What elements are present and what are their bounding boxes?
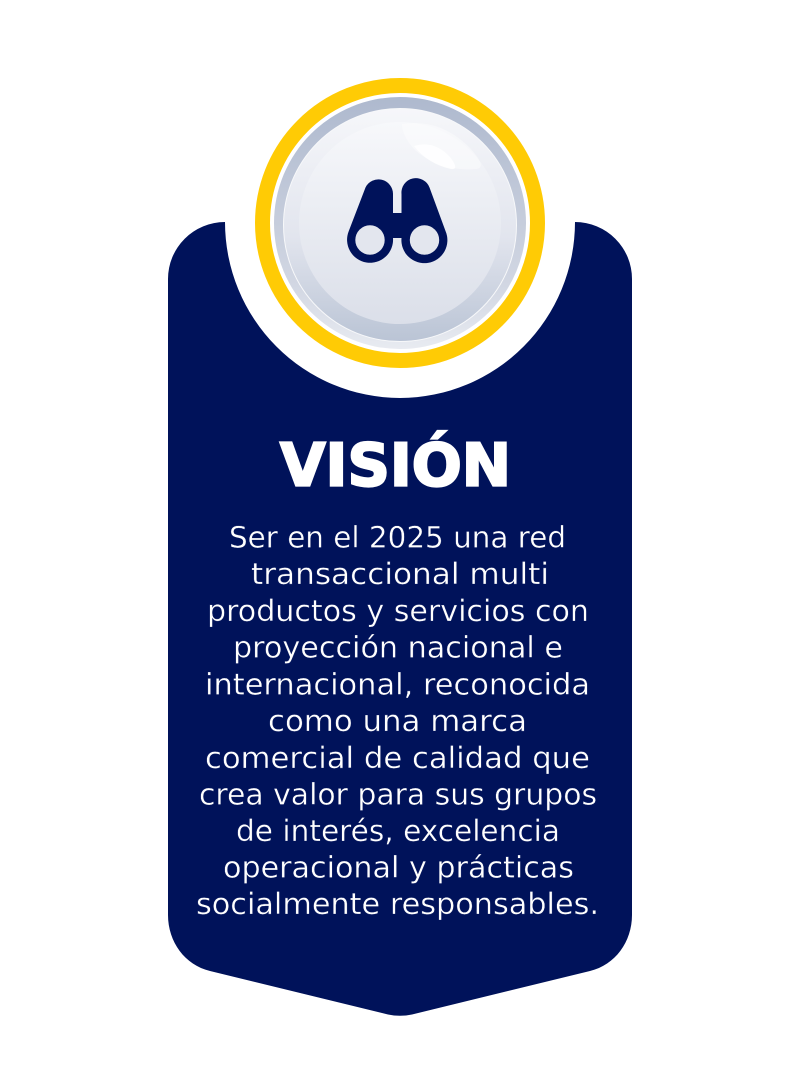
text block: vision statement	[196, 520, 599, 921]
text block: vision statement: socialmente responsables.	[196, 887, 599, 921]
text block: vision statement: productos y servicios con	[207, 594, 589, 628]
text block: vision statement: Ser en el 2025 una red	[229, 520, 566, 554]
title: VISIÓN	[280, 430, 511, 500]
icon: glossy binoculars badge	[262, 86, 538, 360]
text block: vision statement: crea valor para sus grupos	[199, 778, 597, 812]
text block: vision statement: internacional, reconocida	[205, 668, 590, 702]
text block: vision statement: de interés, excelencia	[236, 814, 560, 848]
text block: vision statement: proyección nacional e	[233, 630, 563, 664]
panel: navy shield	[168, 222, 632, 1016]
text block: vision statement: transaccional multi	[251, 557, 549, 591]
text block: vision statement: como una marca	[268, 704, 527, 738]
text block: vision statement: comercial de calidad que	[205, 741, 590, 775]
icon: binoculars	[347, 178, 447, 263]
text block: vision statement: operacional y prácticas	[223, 850, 574, 884]
